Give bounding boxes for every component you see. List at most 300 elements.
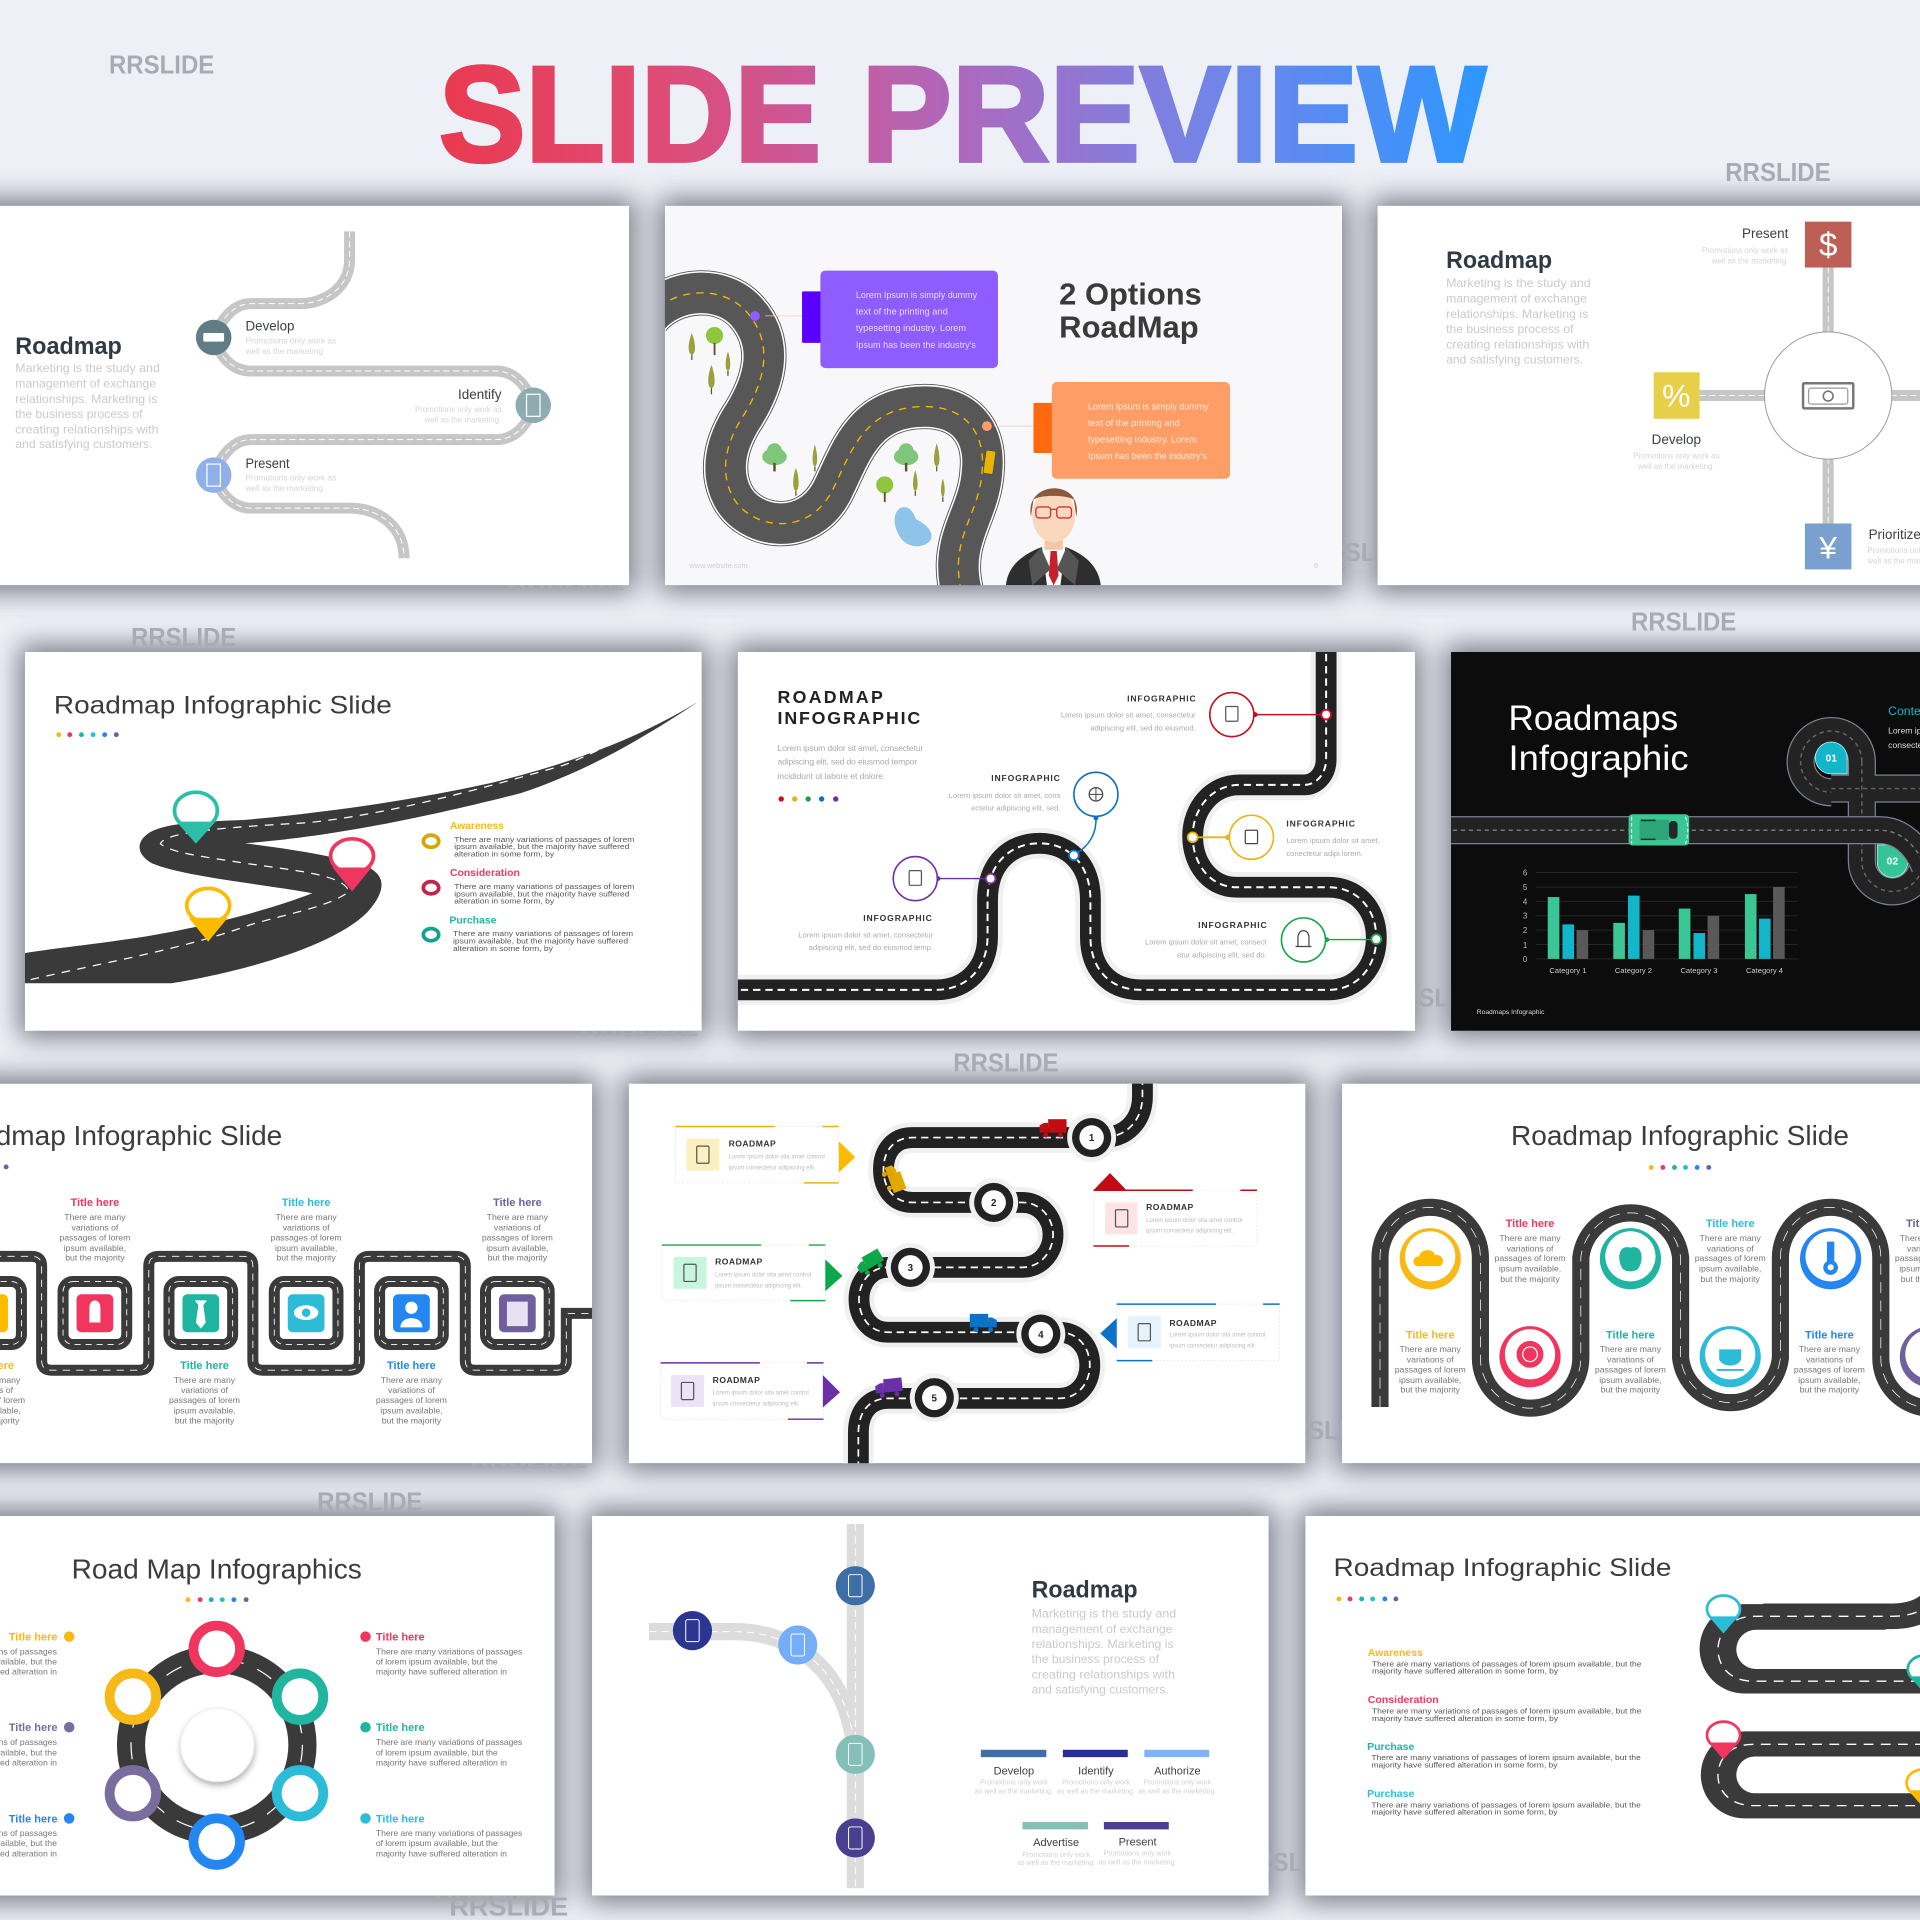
bar chart: 3 xyxy=(1523,911,1528,920)
text block: labels: Present xyxy=(246,456,290,471)
legend labels: as well as the marketing. xyxy=(975,1787,1053,1795)
icon nodes xyxy=(673,1566,875,1858)
callout box: blue xyxy=(1100,1304,1280,1361)
text block: labels: Promotions only work as xyxy=(246,336,336,345)
color dots xyxy=(1337,1596,1398,1601)
text block: heading: Marketing is the study and xyxy=(15,361,160,375)
legend items xyxy=(423,821,634,953)
footer text: 9 xyxy=(1314,561,1318,570)
panel: slide 2 options roadmap xyxy=(649,206,1342,590)
text blocks: bottom captions: but the majority xyxy=(1800,1385,1860,1395)
legend items: alteration in some form, by xyxy=(454,850,554,859)
callout: blue: INFOGRAPHIC xyxy=(991,773,1060,783)
legend bars xyxy=(981,1750,1209,1829)
text block: labels: Present xyxy=(1742,226,1789,241)
numbered nodes: 4 xyxy=(1038,1330,1044,1341)
text block: heading: Marketing is the study and xyxy=(1446,276,1591,290)
icon: pink pin xyxy=(1707,1722,1740,1760)
numbered nodes: 1 xyxy=(1089,1133,1095,1144)
text blocks: left: Title here xyxy=(9,1722,58,1734)
text blocks: right: There are many variations of passages xyxy=(376,1828,523,1838)
callout: red xyxy=(1061,693,1331,737)
legend items: alteration in some form, by xyxy=(454,897,554,906)
watermarks: RRSLIDE xyxy=(1384,985,1489,1013)
text blocks: top captions: ipsum available, xyxy=(64,1243,126,1253)
text blocks: bottom captions: variations of xyxy=(1806,1354,1853,1364)
callout box: yellow: ipsum consectetur adipiscing elit. xyxy=(729,1164,816,1171)
panel: slide 5 roadmap infographic xyxy=(729,643,1416,1031)
callout: red: Lorem ipsum dolor sit amet, consectetur xyxy=(1061,711,1196,720)
watermarks: RRSLIDE xyxy=(1310,539,1416,567)
callout box: yellow xyxy=(675,1127,855,1183)
text block: heading: relationships. Marketing is xyxy=(1446,307,1588,321)
main road xyxy=(1445,830,1920,867)
icon: road nodes xyxy=(196,320,551,493)
legend labels: Promotions only work xyxy=(1143,1779,1212,1787)
icon: percent square: % xyxy=(1662,378,1690,414)
heading: Roadmap Infographic Slide xyxy=(1333,1554,1671,1582)
bar chart: Category 2 xyxy=(1615,966,1652,975)
text block: heading xyxy=(15,333,160,451)
footer text xyxy=(690,562,1318,568)
text blocks: bottom captions: variations of xyxy=(388,1385,435,1395)
panel: slide 11 road junction xyxy=(591,1516,1270,1896)
footer text: Roadmaps Infographic xyxy=(1477,1009,1545,1016)
text block: heading: and satisfying customers. xyxy=(15,437,152,451)
watermarks: RRSLIDE xyxy=(109,51,214,79)
callout box: red xyxy=(1093,1173,1257,1246)
text blocks: bottom captions xyxy=(1395,1329,1865,1395)
icon: businessman xyxy=(1006,488,1101,585)
text blocks: bottom captions: ipsum available, xyxy=(1798,1375,1861,1385)
text block: heading: creating relationships with xyxy=(1032,1668,1175,1682)
callout box: yellow: ROADMAP xyxy=(729,1139,776,1149)
callout box: red: ipsum consectetur adipiscing elit. xyxy=(1146,1227,1233,1234)
legend items: alteration in some form, by xyxy=(453,944,553,953)
callout box: purple: ROADMAP xyxy=(713,1375,760,1385)
color dots xyxy=(56,732,119,737)
watermarks: RRSLIDE xyxy=(470,1446,588,1474)
road xyxy=(649,293,982,590)
text blocks: top captions: There are many xyxy=(487,1212,549,1222)
bar chart: 0 xyxy=(1523,955,1528,964)
text blocks: top captions: passages of lorem xyxy=(482,1232,553,1242)
watermarks: RRSLIDE xyxy=(1273,1417,1379,1445)
callout box: blue: Lorem ipsum dolor sita amet control xyxy=(1169,1332,1266,1339)
icon: teal pin xyxy=(174,792,217,844)
ring nodes xyxy=(110,1626,323,1865)
watermarks: RRSLIDE xyxy=(1725,159,1831,187)
callout box: green: Lorem ipsum dolor sita amet control xyxy=(715,1272,811,1279)
text blocks: right: Title here xyxy=(376,1722,425,1734)
panel: slide 3 roadmap cross xyxy=(1378,206,1920,585)
callout: yellow: conectetur adipi lorem. xyxy=(1286,849,1363,858)
road xyxy=(24,700,701,983)
heading: INFOGRAPHIC xyxy=(778,708,920,728)
callout: green xyxy=(1145,918,1381,962)
text blocks: top captions: passages of lorem xyxy=(271,1232,342,1242)
text block: heading: and satisfying customers. xyxy=(1446,353,1583,367)
legend items: Consideration xyxy=(450,868,520,879)
bar chart: 6 xyxy=(1523,869,1528,878)
panel: slide 7 square track xyxy=(0,1084,600,1463)
callout: green: Lorem ipsum dolor sit amet, consect xyxy=(1145,938,1268,947)
text block: heading xyxy=(1446,247,1591,367)
ring road xyxy=(131,1659,302,1831)
roads xyxy=(1700,267,1920,524)
text blocks: bottom captions xyxy=(0,1360,447,1425)
road xyxy=(858,1078,1142,1469)
numbered nodes xyxy=(886,1113,1116,1422)
panel: slide 12 roadmap with pins xyxy=(1305,1516,1920,1896)
text blocks: right: There are many variations of passages xyxy=(376,1646,523,1656)
badge 01 xyxy=(1815,742,1847,774)
bar chart xyxy=(1523,869,1798,975)
heading: Lorem ipsum dolor sit amet, consectetur xyxy=(778,743,923,753)
callout: purple box xyxy=(750,271,998,368)
text blocks: top captions: Title here xyxy=(493,1197,542,1209)
callout box: purple: Lorem ipsum dolor sita amet control xyxy=(713,1390,809,1397)
callout box: blue: ROADMAP xyxy=(1169,1318,1217,1328)
text blocks: bottom captions: ipsum available, xyxy=(380,1405,443,1415)
watermarks: RRSLIDE xyxy=(1631,609,1736,637)
callout: orange box: typesetting industry. Lorem xyxy=(1088,435,1197,445)
icon rings xyxy=(1400,1228,1920,1387)
text blocks: bottom captions: Title here xyxy=(387,1360,436,1372)
road xyxy=(0,1256,600,1370)
callout: purple box: text of the printing and xyxy=(856,307,948,317)
text blocks: bottom captions: Title here xyxy=(1606,1329,1655,1341)
text block: labels: Develop xyxy=(246,319,294,334)
text blocks: bottom captions: but the majority xyxy=(1601,1385,1661,1395)
callout: green: INFOGRAPHIC xyxy=(1198,920,1267,930)
text blocks: bottom captions: passages of lorem xyxy=(1595,1364,1666,1374)
legend labels: Advertise xyxy=(1033,1837,1079,1849)
text blocks: right: Title here xyxy=(376,1813,425,1825)
roads xyxy=(1801,731,1920,891)
legend labels: Identify xyxy=(1078,1765,1114,1777)
icon: percent square xyxy=(1654,372,1700,419)
text block: labels: well as the marketing. xyxy=(244,347,325,356)
text blocks: top captions: but the majority xyxy=(488,1253,548,1263)
legend labels: Authorize xyxy=(1154,1765,1201,1777)
text block: labels xyxy=(244,319,502,493)
callout: purple: Lorem ipsum dolor sit amet, consectetur xyxy=(798,930,934,939)
text blocks: bottom captions: passages of lorem xyxy=(169,1395,240,1405)
taxi xyxy=(983,450,996,474)
text blocks: top captions: passages of lorem xyxy=(59,1232,130,1242)
text blocks: right: majority have suffered alteration in xyxy=(376,1848,507,1858)
legend text: majority have suffered alteration in some form, by xyxy=(1371,1807,1558,1816)
text blocks: top captions: variations of xyxy=(283,1223,330,1233)
text blocks: bottom captions: ipsum available, xyxy=(1399,1375,1461,1385)
panel: slide 4 roadmap with pins xyxy=(24,651,703,1031)
text block: heading: management of exchange xyxy=(1446,291,1587,305)
text blocks: right: There are many variations of passages xyxy=(376,1737,523,1747)
text blocks: bottom captions: but the majority xyxy=(1401,1385,1461,1395)
legend text: There are many variations of passages of lorem ipsum available, but the xyxy=(1372,1660,1641,1669)
legend text: There are many variations of passages of lorem ipsum available, but the xyxy=(1371,1753,1641,1762)
center disc xyxy=(181,1708,255,1785)
watermarks: RRSLIDE xyxy=(1238,1849,1343,1877)
text blocks: right xyxy=(360,1631,523,1858)
callout: yellow: Lorem ipsum dolor sit amet, xyxy=(1286,836,1380,845)
icon: yen square xyxy=(1805,523,1851,569)
heading xyxy=(778,687,923,802)
text blocks: bottom captions: passages of lorem xyxy=(1794,1364,1865,1374)
color dot xyxy=(4,1164,9,1169)
legend text: Consideration xyxy=(1368,1695,1439,1706)
text blocks: right: of lorem ipsum available, but the xyxy=(376,1747,498,1757)
legend items: ipsum available, but the majority have suffered xyxy=(453,936,628,945)
text blocks: top captions: variations of xyxy=(1707,1243,1754,1253)
icon: car xyxy=(1629,814,1689,846)
text blocks: bottom captions: but the majority xyxy=(175,1415,235,1425)
legend items: There are many variations of passages of lorem xyxy=(454,835,634,844)
legend text: majority have suffered alteration in some form, by xyxy=(1371,1760,1558,1769)
callout box: green: ROADMAP xyxy=(715,1257,763,1267)
text blocks: bottom captions: There are many xyxy=(1600,1344,1662,1354)
callout: blue: Lorem ipsum dolor sit amet, cons xyxy=(949,791,1061,800)
text blocks: top captions: but the majority xyxy=(65,1253,125,1263)
heading: 2 Options xyxy=(1059,277,1202,311)
callout: green: etur adipiscing elit, sed do. xyxy=(1177,951,1267,960)
road xyxy=(1380,1207,1920,1408)
legend labels: as well as the marketing. xyxy=(1099,1858,1177,1866)
numbered nodes: 2 xyxy=(991,1198,997,1209)
color dots xyxy=(186,1597,249,1602)
text blocks: top captions: passages of lorem xyxy=(1695,1253,1766,1263)
main title xyxy=(439,38,1487,190)
text blocks: top captions: variations of xyxy=(494,1223,541,1233)
legend labels: Promotions only work xyxy=(1104,1850,1172,1858)
text block: heading xyxy=(1032,1576,1176,1696)
heading: Roadmap Infographic Slide xyxy=(54,691,392,719)
callout box: purple: ipsum consectetur adipiscing elit. xyxy=(713,1401,800,1408)
text blocks: bottom captions: There are many xyxy=(1799,1344,1861,1354)
callout: orange box: text of the printing and xyxy=(1088,418,1180,428)
text blocks: left: Title here xyxy=(9,1813,58,1825)
badge 02 xyxy=(1877,845,1908,877)
text blocks: bottom captions: passages of lorem xyxy=(1395,1364,1466,1374)
text blocks: top captions: but the majority xyxy=(1701,1274,1761,1284)
text blocks: top captions: but the majority xyxy=(276,1253,336,1263)
text blocks: bottom captions: Title here xyxy=(1406,1329,1455,1341)
text block: labels: Promotions only work as xyxy=(1633,452,1720,461)
text block: labels: well as the marketing. xyxy=(1637,462,1715,471)
text block: heading: creating relationships with xyxy=(15,422,159,436)
text blocks: bottom captions: ipsum available, xyxy=(1599,1375,1662,1385)
callout box: red: Lorem ipsum dolor sita amet control xyxy=(1146,1217,1242,1224)
text blocks: top captions: There are many xyxy=(64,1212,126,1222)
callout box: red: ROADMAP xyxy=(1146,1202,1194,1212)
footer text: www.website.com xyxy=(688,561,748,570)
heading: ROADMAP xyxy=(778,687,883,707)
text block: heading: the business process of xyxy=(1032,1652,1160,1666)
badge 01: 01 xyxy=(1825,754,1837,765)
heading: Infographic xyxy=(1509,739,1689,778)
text blocks: right: majority have suffered alteration in xyxy=(376,1757,507,1767)
badge 02: 02 xyxy=(1887,856,1898,867)
bar chart: 2 xyxy=(1523,926,1528,935)
text block: heading: Roadmap xyxy=(1032,1576,1138,1603)
text blocks: right: Title here xyxy=(376,1632,425,1644)
text blocks: left: Title here xyxy=(9,1632,58,1644)
text block: heading: relationships. Marketing is xyxy=(15,392,157,406)
side text xyxy=(1888,704,1920,750)
icon: yen square: ¥ xyxy=(1818,529,1837,565)
icon: cyan pin xyxy=(1707,1596,1740,1633)
text blocks: bottom captions: variations of xyxy=(1607,1354,1654,1364)
text blocks: left xyxy=(0,1631,74,1858)
text block: heading: management of exchange xyxy=(15,377,156,391)
text block: labels: well as the marketing. xyxy=(1711,256,1788,265)
panel: slide 1 roadmap xyxy=(0,206,629,585)
text blocks: bottom captions: Title here xyxy=(180,1360,229,1372)
icon: pink pin xyxy=(331,839,373,891)
callout: yellow: INFOGRAPHIC xyxy=(1286,819,1355,829)
icon: yellow pin xyxy=(1907,1769,1920,1807)
text block: heading: the business process of xyxy=(1446,322,1574,336)
trees and lake xyxy=(689,327,945,546)
text blocks: top captions: Title here xyxy=(282,1197,331,1209)
callout box: yellow: Lorem ipsum dolor sita amet control xyxy=(729,1153,825,1160)
text block: labels: Promotions only work as xyxy=(1702,246,1788,255)
legend text: Purchase xyxy=(1367,1742,1415,1753)
legend items: There are many variations of passages of lorem xyxy=(453,929,633,938)
legend labels: Develop xyxy=(994,1765,1034,1777)
panel: slide 6 dark roadmaps xyxy=(1445,651,1920,1031)
text blocks: top captions: ipsum available, xyxy=(486,1243,548,1253)
text blocks: top captions: variations of xyxy=(71,1223,119,1233)
icon: yellow pin xyxy=(187,888,230,942)
watermarks: RRSLIDE xyxy=(317,1488,422,1516)
icon: teal pin xyxy=(1908,1656,1920,1693)
road xyxy=(214,231,533,558)
text block: labels: well as the marketing. xyxy=(424,415,501,424)
legend text: majority have suffered alteration in some form, by xyxy=(1372,1667,1559,1676)
text blocks: top captions xyxy=(1494,1218,1920,1284)
watermarks: RRSLIDE xyxy=(580,1014,698,1042)
text blocks: bottom captions: There are many xyxy=(381,1375,443,1385)
text block: labels: well as the marketing. xyxy=(244,484,325,493)
text block: labels: Promotions only work as xyxy=(246,474,336,483)
text blocks: top captions: Title here xyxy=(1506,1218,1554,1230)
callout: purple box: Ipsum has been the industry's xyxy=(856,340,976,350)
road xyxy=(1700,1573,1920,1818)
watermarks: RRSLIDE xyxy=(131,624,236,652)
bar chart: Category 1 xyxy=(1549,966,1586,975)
text block: labels: Identify xyxy=(458,387,502,402)
icon: dollar square xyxy=(1805,222,1851,268)
watermarks: RRSLIDE xyxy=(508,568,624,596)
text blocks: top captions: ipsum available, xyxy=(275,1243,337,1253)
text blocks: bottom captions: but the majority xyxy=(382,1415,442,1425)
icon: trucks xyxy=(854,1119,1067,1399)
text block: labels: Promotions only work as xyxy=(415,405,501,414)
callout: red: INFOGRAPHIC xyxy=(1127,694,1196,704)
callout: yellow xyxy=(1188,815,1380,859)
callout: red: adipiscing elit, sed do eiusmod. xyxy=(1090,723,1196,732)
legend labels: as well as the marketing. xyxy=(1057,1787,1135,1795)
bar chart: 1 xyxy=(1523,941,1528,950)
text block: heading: Roadmap xyxy=(1446,247,1552,274)
text blocks: right: majority have suffered alteration in xyxy=(376,1667,507,1677)
callout: purple: adipiscing elit, sed do eiusmod temp. xyxy=(809,943,933,952)
text blocks: top captions: There are many xyxy=(1700,1233,1762,1243)
callout: blue: ectetur adipiscing elit, sed. xyxy=(971,804,1060,813)
text block: heading: and satisfying customers. xyxy=(1032,1682,1169,1696)
text blocks: bottom captions: Title here xyxy=(1805,1329,1854,1341)
legend items: There are many variations of passages of lorem xyxy=(454,882,634,891)
text block: heading: management of exchange xyxy=(1032,1622,1173,1636)
text blocks: top captions xyxy=(59,1197,553,1263)
text blocks: right: of lorem ipsum available, but the xyxy=(376,1838,498,1848)
heading: Road Map Infographics xyxy=(72,1553,362,1584)
text blocks: bottom captions: passages of lorem xyxy=(376,1395,447,1405)
legend items: Awareness xyxy=(450,821,504,832)
heading: incididunt ut labore et dolore. xyxy=(778,771,885,781)
text blocks: right: of lorem ipsum available, but the xyxy=(376,1657,498,1667)
center circle and money icon xyxy=(1764,332,1892,459)
numbered nodes: 5 xyxy=(932,1393,938,1404)
legend labels: as well as the marketing. xyxy=(1017,1859,1095,1867)
legend text: There are many variations of passages of lorem ipsum available, but the xyxy=(1372,1707,1641,1716)
callout box: blue: ipsum consectetur adipiscing elit. xyxy=(1169,1343,1257,1350)
icon tiles xyxy=(0,1282,549,1344)
text block: labels: Prioritize xyxy=(1869,527,1920,542)
legend labels: Promotions only work xyxy=(1062,1779,1130,1787)
text block: labels xyxy=(1633,226,1920,565)
text blocks: top captions: ipsum available, xyxy=(1499,1264,1561,1274)
heading xyxy=(1059,277,1202,344)
callout: orange box: Lorem Ipsum is simply dummy xyxy=(1088,402,1209,412)
watermarks: RRSLIDE xyxy=(953,1049,1059,1077)
text blocks: top captions: variations of xyxy=(1507,1243,1554,1253)
text blocks: top captions: Title here xyxy=(1706,1218,1755,1230)
text blocks: top captions: There are many xyxy=(1499,1233,1561,1243)
text block: labels: Develop xyxy=(1652,432,1701,447)
text blocks: bottom captions: ipsum available, xyxy=(173,1405,236,1415)
main title: SLIDE xyxy=(439,38,821,190)
callout box: purple xyxy=(661,1363,840,1419)
legend text: There are many variations of passages of lorem ipsum available, but the xyxy=(1371,1800,1641,1809)
main title: PREVIEW xyxy=(861,38,1487,190)
callout: purple: INFOGRAPHIC xyxy=(863,913,932,923)
text block: heading: the business process of xyxy=(15,407,143,421)
text blocks: top captions: but the majority xyxy=(1500,1274,1560,1284)
text blocks: top captions: There are many xyxy=(275,1212,337,1222)
legend labels xyxy=(975,1765,1216,1867)
callout: blue xyxy=(949,772,1118,860)
panel: slide 10 ring road xyxy=(0,1516,555,1896)
text blocks: top captions: ipsum available, xyxy=(1699,1264,1761,1274)
text blocks: top captions: passages of lorem xyxy=(1494,1253,1565,1263)
callout box: green: ipsum consectetur adipiscing elit. xyxy=(715,1283,802,1290)
callout: orange box: Ipsum has been the industry's xyxy=(1088,451,1207,461)
legend text: Purchase xyxy=(1367,1789,1415,1800)
legend items: ipsum available, but the majority have suffered xyxy=(454,889,629,898)
icon: dollar square: $ xyxy=(1819,227,1837,264)
heading: Roadmaps xyxy=(1509,699,1678,738)
text block: heading: creating relationships with xyxy=(1446,337,1590,351)
text block: heading: Roadmap xyxy=(15,333,122,360)
panel: slide 9 serpentine road xyxy=(1342,1084,1920,1463)
bar chart: 4 xyxy=(1523,897,1528,906)
legend labels: Promotions only work xyxy=(1022,1851,1090,1859)
text blocks: bottom captions: There are many xyxy=(1400,1344,1462,1354)
legend text xyxy=(1367,1648,1641,1816)
